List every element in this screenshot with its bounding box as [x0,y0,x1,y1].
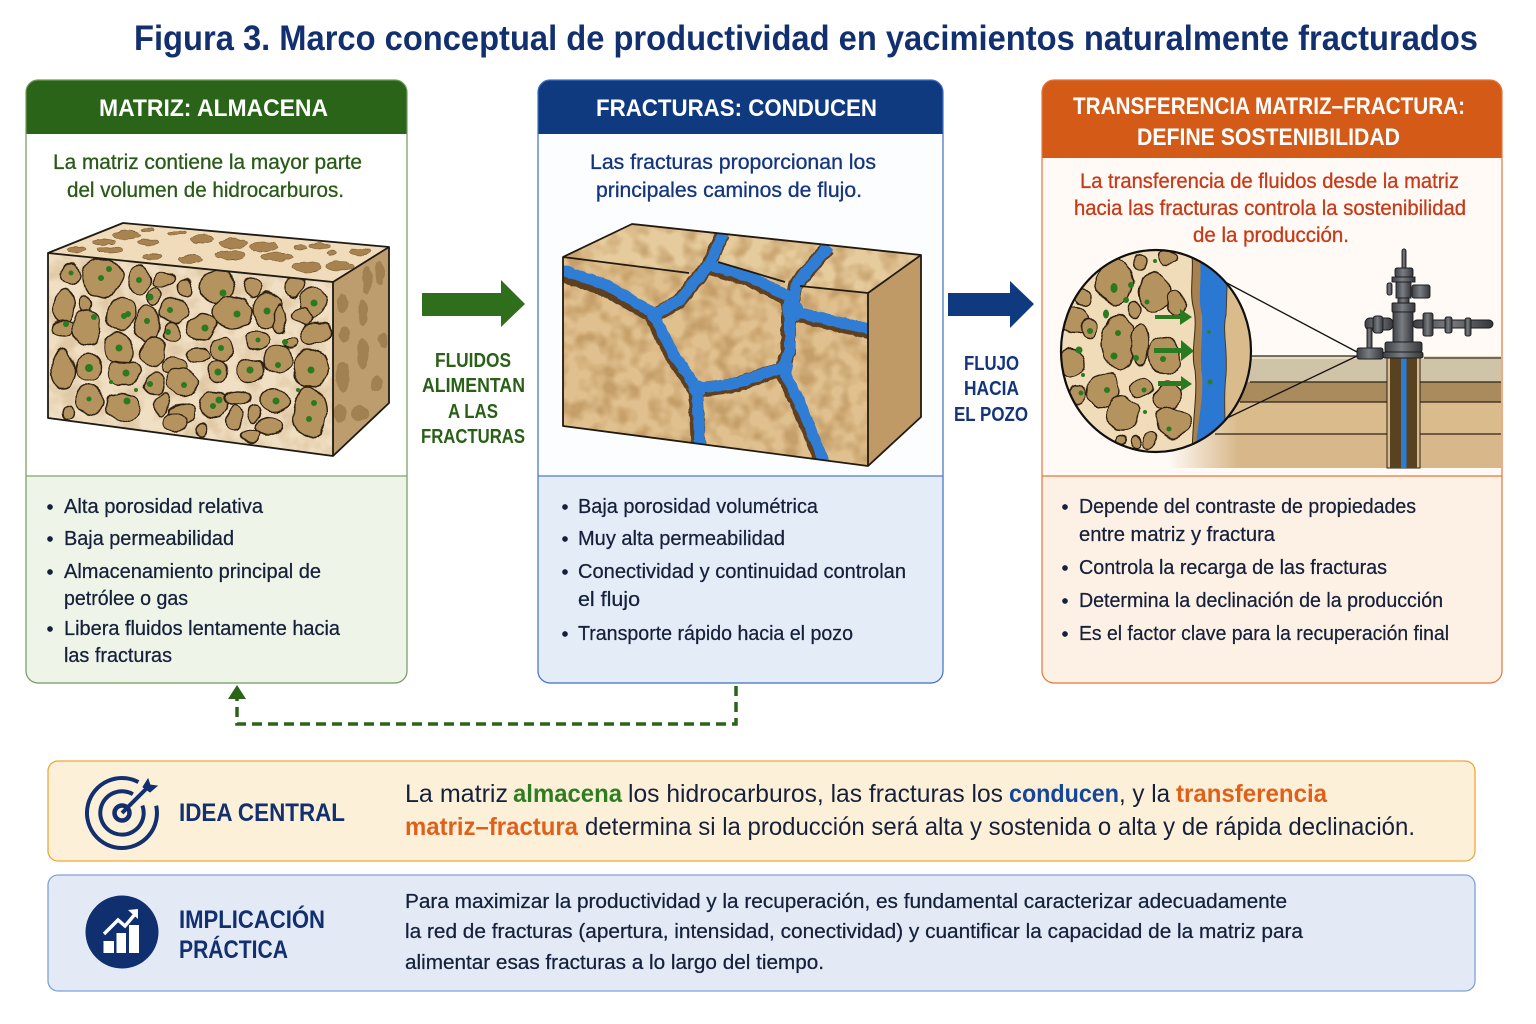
panel header bar [26,80,407,134]
lead text: del volumen de hidrocarburos. [67,179,344,202]
statement: alimentar esas fracturas a lo largo del tiempo. [405,952,824,974]
arrow label: flujo hacia el pozo [954,353,1028,426]
statement: La matriz [405,780,508,808]
panel heading: MATRIZ: ALMACENA [99,95,328,122]
illustration: porous matrix block [40,223,389,460]
arrow label: fluidos alimentan a las fracturas: A LAS [448,401,498,423]
panel border [1042,80,1502,683]
arrow label: fluidos alimentan a las fracturas: FLUIDOS [435,350,511,372]
bullet list: Baja porosidad volumétrica [578,496,819,518]
lead text: Las fracturas proporcionan los [590,151,876,174]
arrow label: flujo hacia el pozo: EL POZO [954,404,1028,426]
statement [405,780,1415,841]
callout lines to magnified view [1225,282,1357,419]
panel border [26,80,407,683]
statement: almacena [513,780,623,808]
arrow: flujo hacia el pozo [948,281,1034,328]
lower fill [538,476,943,683]
bullet list [47,496,341,667]
bullet list: petrólee o gas [64,588,188,610]
panel header bar [1042,80,1502,158]
statement: matriz–fractura [405,813,579,841]
arrow label: flujo hacia el pozo: FLUJO [964,353,1019,375]
panel: matriz [26,80,407,683]
panel background [26,80,407,683]
bullet list: Es el factor clave para la recuperación final [1079,623,1449,645]
bullet list: Controla la recarga de las fracturas [1079,557,1387,579]
statement: Para maximizar la productividad y la recuperación, es fundamental caracterizar adecuadamente [405,891,1287,913]
bullet list: Conectividad y continuidad controlan [578,561,906,583]
bullet list: el flujo [578,589,640,611]
heading: PRÁCTICA [179,935,288,964]
panel background [538,80,943,683]
bullet list: Baja permeabilidad [64,528,234,550]
transfer arrows [1154,309,1194,391]
lower fill [1042,476,1502,683]
panel header bar [538,80,943,134]
arrow label: fluidos alimentan a las fracturas [421,350,525,448]
statement: determina si la producción será alta y sostenida o alta y de rápida declinación. [585,813,1415,841]
arrow: fluidos alimentan [422,280,525,327]
lead text [1074,170,1466,247]
lead text: La transferencia de fluidos desde la matriz [1080,170,1459,193]
lead text: hacia las fracturas controla la sostenibilidad [1074,197,1466,220]
arrow label: fluidos alimentan a las fracturas: ALIMENTAN [422,375,525,397]
bullet list [1062,496,1449,645]
bullet list: las fracturas [64,645,172,667]
bullet list: Depende del contraste de propiedades [1079,496,1416,518]
statement: los hidrocarburos, las fracturas los [628,780,1003,808]
statement: transferencia [1176,780,1328,808]
bullet list: Libera fluidos lentamente hacia [64,618,341,640]
title: Figura 3. Marco conceptual de productividad en yacimientos naturalmente fracturados [134,19,1478,58]
lead text [590,151,876,202]
statement: conducen [1009,780,1119,808]
panel heading: DEFINE SOSTENIBILIDAD [1137,124,1400,151]
illustration: wellhead [1357,249,1493,359]
panel: transferencia [1042,80,1502,683]
heading: IMPLICACIÓN [179,904,325,934]
illustration: ground strata and well [1168,355,1501,469]
panel border [538,80,943,683]
panel heading: TRANSFERENCIA MATRIZ–FRACTURA: [1073,93,1465,120]
lead text: de la producción. [1193,224,1349,247]
illustration: fractured rock block [562,223,922,467]
bullet list [562,496,906,645]
lower fill [26,476,407,683]
bullet list: Transporte rápido hacia el pozo [578,623,853,645]
illustration: magnified matrix-fracture interface [1060,248,1252,454]
lead text: La matriz contiene la mayor parte [53,151,362,174]
icon: rising chart [86,896,158,968]
heading: IDEA CENTRAL [179,799,345,827]
panel: implicación práctica [48,875,1475,991]
panel: idea central [48,761,1475,861]
bullet list: Determina la declinación de la producción [1079,590,1443,612]
bullet list: Muy alta permeabilidad [578,528,785,550]
statement: la red de fracturas (apertura, intensidad, conectividad) y cuantificar la capacidad de la matriz para [405,921,1304,943]
statement [405,891,1304,974]
icon: target with arrow [87,778,157,848]
arrow label: flujo hacia el pozo: HACIA [964,378,1019,400]
bullet list: Alta porosidad relativa [64,496,264,518]
panel heading [1073,93,1465,151]
arrow label: fluidos alimentan a las fracturas: FRACTURAS [421,426,525,448]
box background [48,761,1475,861]
bullet list: entre matriz y fractura [1079,524,1276,546]
statement: , y la [1119,780,1170,808]
panel background [1042,80,1502,683]
arrow: dashed feedback from fractures to matrix [228,685,736,724]
bullet list: Almacenamiento principal de [64,561,321,583]
lead text [53,151,362,202]
heading [179,904,325,964]
box background [48,875,1475,991]
lead text: principales caminos de flujo. [596,179,862,202]
panel heading: FRACTURAS: CONDUCEN [596,95,877,122]
panel: fracturas [538,80,943,683]
